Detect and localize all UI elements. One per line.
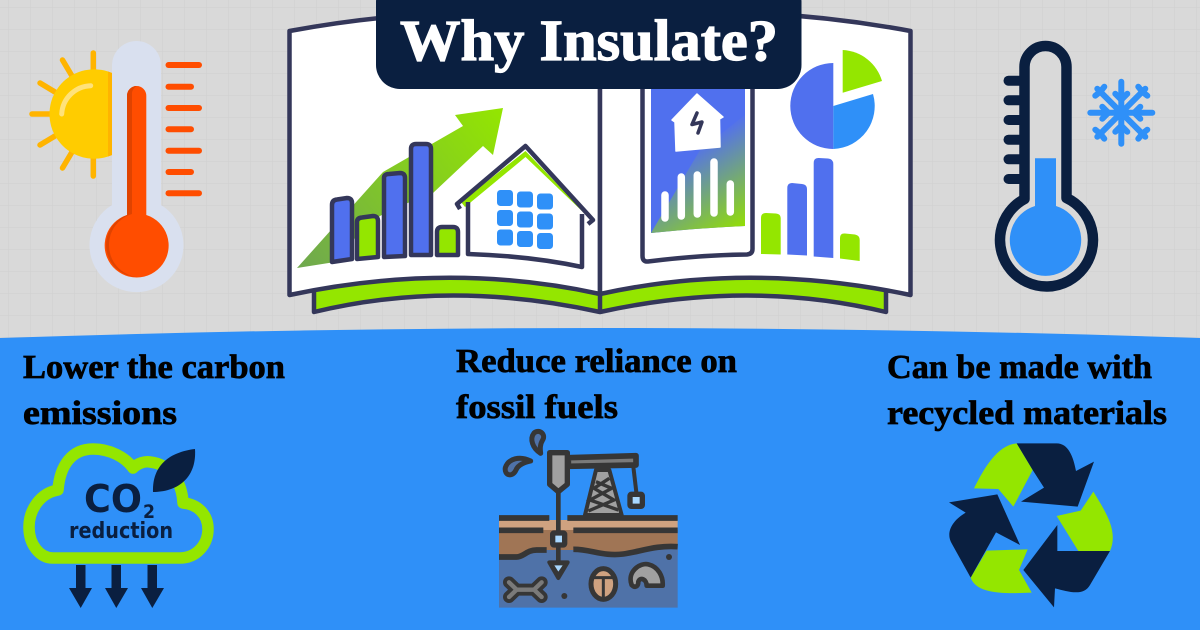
icon: CO2 reduction cloud xyxy=(29,449,208,608)
thermometer casing xyxy=(90,41,184,292)
roof underside xyxy=(461,151,589,217)
phone body xyxy=(642,60,752,262)
heading: can be made with recycled materials xyxy=(887,349,1167,432)
pump rod xyxy=(551,492,565,562)
snowflake xyxy=(1090,82,1152,144)
heading: reduce reliance on fossil fuels: Reduce reliance on xyxy=(456,343,737,380)
scale ticks xyxy=(1008,81,1022,179)
counterweight xyxy=(633,467,637,495)
green arrows xyxy=(971,443,1113,593)
heading: can be made with recycled materials: recycled materials xyxy=(887,395,1167,432)
sun rays xyxy=(32,53,93,176)
heading: lower the carbon emissions: emissions xyxy=(23,395,177,432)
title text: Why Insulate? xyxy=(400,8,778,73)
mercury xyxy=(1010,158,1081,276)
ground lines xyxy=(499,518,678,557)
left bar chart xyxy=(332,144,458,262)
bolt xyxy=(692,113,702,133)
heading: reduce reliance on fossil fuels: fossil fuels xyxy=(456,389,618,426)
heading: reduce reliance on fossil fuels xyxy=(456,343,737,426)
drill tip xyxy=(549,562,568,578)
scale ticks xyxy=(168,65,199,193)
solar panels xyxy=(497,190,553,249)
icon: CO2 reduction cloud: 2 xyxy=(143,501,155,523)
fossil beetle xyxy=(591,569,616,599)
cloud outline xyxy=(29,449,208,558)
rod collar xyxy=(553,533,565,545)
growth arrow xyxy=(297,108,503,268)
pump tower xyxy=(585,470,622,515)
title banner xyxy=(376,0,802,89)
book green base xyxy=(314,270,886,312)
pump head xyxy=(550,453,567,492)
book left page xyxy=(290,12,600,295)
fossil bone xyxy=(509,582,542,597)
mercury xyxy=(105,86,169,278)
right bar chart xyxy=(761,158,860,261)
fossil shell xyxy=(631,564,663,587)
book spine xyxy=(598,290,602,312)
reduction label: reduction xyxy=(69,519,173,544)
icon: recycling symbol xyxy=(949,443,1113,607)
dark arrows xyxy=(949,443,1110,607)
phone with energy app xyxy=(642,60,752,262)
house with solar panels xyxy=(457,146,593,267)
ground layers xyxy=(499,520,678,530)
heading: lower the carbon emissions: Lower the carbon xyxy=(23,349,285,386)
oil drops xyxy=(505,458,531,475)
sun disc xyxy=(49,69,112,159)
illustration: open book xyxy=(290,12,910,312)
down arrows xyxy=(69,565,164,608)
phone screen xyxy=(651,70,745,233)
icon: hot thermometer with sun xyxy=(32,41,199,292)
house icon xyxy=(672,94,723,151)
CO2 label: CO xyxy=(84,477,142,521)
leaf xyxy=(153,449,195,492)
icon: cold thermometer with snowflake xyxy=(1000,46,1152,286)
heading: can be made with recycled materials: Can be made with xyxy=(887,349,1152,386)
icon: oil pump over ground layers xyxy=(499,431,678,608)
roof and walls xyxy=(457,146,593,224)
thermometer outline xyxy=(1000,46,1093,286)
book right page xyxy=(600,12,910,295)
blue lower panel xyxy=(0,328,1200,630)
pump beam xyxy=(568,456,636,466)
pie chart xyxy=(790,50,882,149)
heading: lower the carbon emissions xyxy=(23,349,285,432)
phone bars xyxy=(665,162,730,218)
